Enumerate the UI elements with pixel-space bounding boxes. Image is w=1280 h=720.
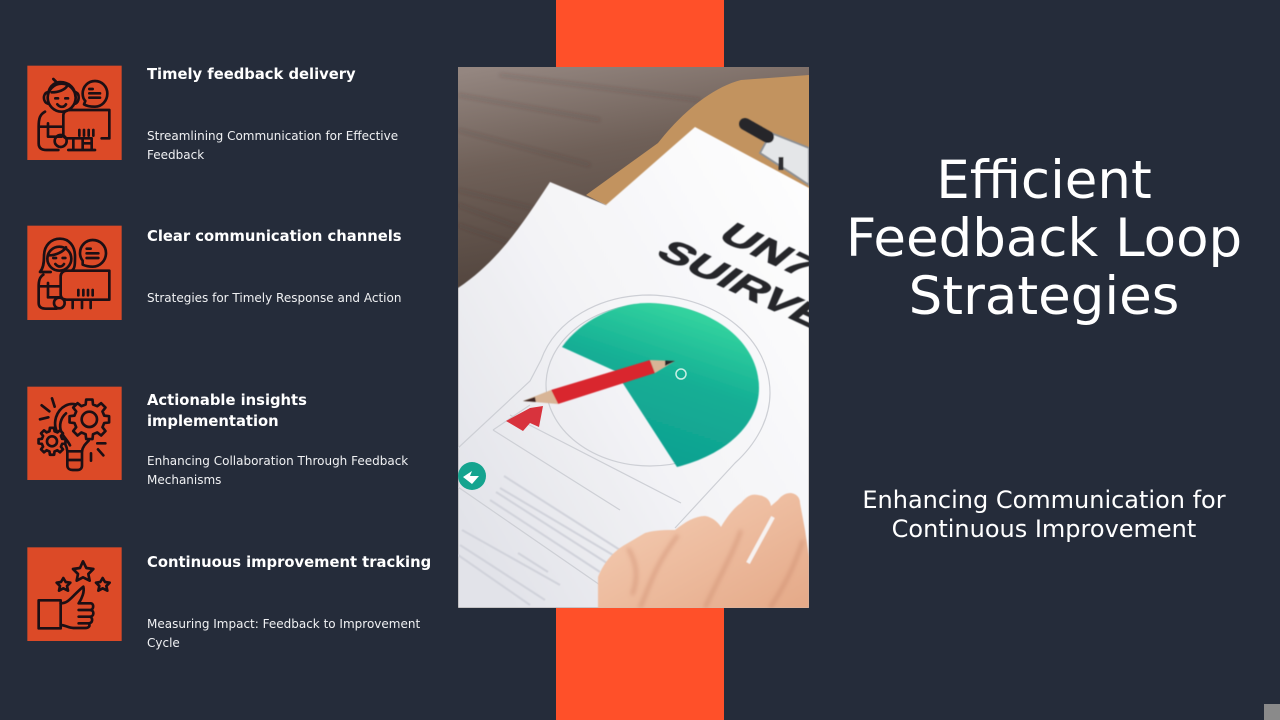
gauge marker ring xyxy=(676,369,686,379)
hand xyxy=(598,493,809,608)
heading: timely feedback delivery: Timely feedback delivery xyxy=(147,66,356,83)
text: timely feedback description xyxy=(147,129,398,162)
metal clip xyxy=(745,124,809,185)
wood table xyxy=(458,67,809,608)
heading: actionable insights implementation: implementation xyxy=(147,413,279,430)
subtitle xyxy=(862,486,1226,543)
orange vertical band xyxy=(556,0,724,720)
text: timely feedback description: Streamlining Communication for Effective xyxy=(147,129,398,143)
heading: clear communication channels: Clear communication channels xyxy=(147,228,402,245)
green gauge sector xyxy=(562,303,759,467)
heading: actionable insights implementation xyxy=(147,392,307,430)
text: continuous improvement description xyxy=(147,617,420,650)
outline of gauge card xyxy=(458,295,770,585)
teal check badge xyxy=(458,462,486,490)
text: actionable insights description: Enhancing Collaboration Through Feedback xyxy=(147,454,408,468)
red arrow xyxy=(506,406,543,431)
title: Feedback Loop xyxy=(846,208,1242,268)
heading: actionable insights implementation: Actionable insights xyxy=(147,392,307,409)
text: actionable insights description: Mechanisms xyxy=(147,473,221,487)
icon: lightbulb with gears xyxy=(27,386,122,480)
text: clear communication description: Strategies for Timely Response and Action xyxy=(147,291,401,305)
text: actionable insights description xyxy=(147,454,408,487)
heading: continuous improvement tracking: Continuous improvement tracking xyxy=(147,554,431,571)
corner grey square xyxy=(1264,704,1280,720)
text: continuous improvement description: Measuring Impact: Feedback to Improvement xyxy=(147,617,420,631)
title: Strategies xyxy=(909,266,1179,326)
pencil xyxy=(523,360,675,404)
clipboard xyxy=(586,75,809,205)
placeholder document lines xyxy=(458,476,620,605)
icon: thumbs up with stars xyxy=(27,547,122,641)
icon: support agent with headset xyxy=(27,66,122,160)
text: timely feedback description: Feedback xyxy=(147,148,204,162)
title: Efficient xyxy=(936,150,1152,210)
icon: support agent woman xyxy=(27,226,122,320)
survey paper xyxy=(458,127,809,608)
subtitle: Enhancing Communication for xyxy=(862,486,1226,514)
subtitle: Continuous Improvement xyxy=(892,515,1196,543)
text: continuous improvement description: Cycle xyxy=(147,636,180,650)
title xyxy=(846,150,1242,326)
photo: survey on clipboard with pencil and hand xyxy=(458,67,809,608)
